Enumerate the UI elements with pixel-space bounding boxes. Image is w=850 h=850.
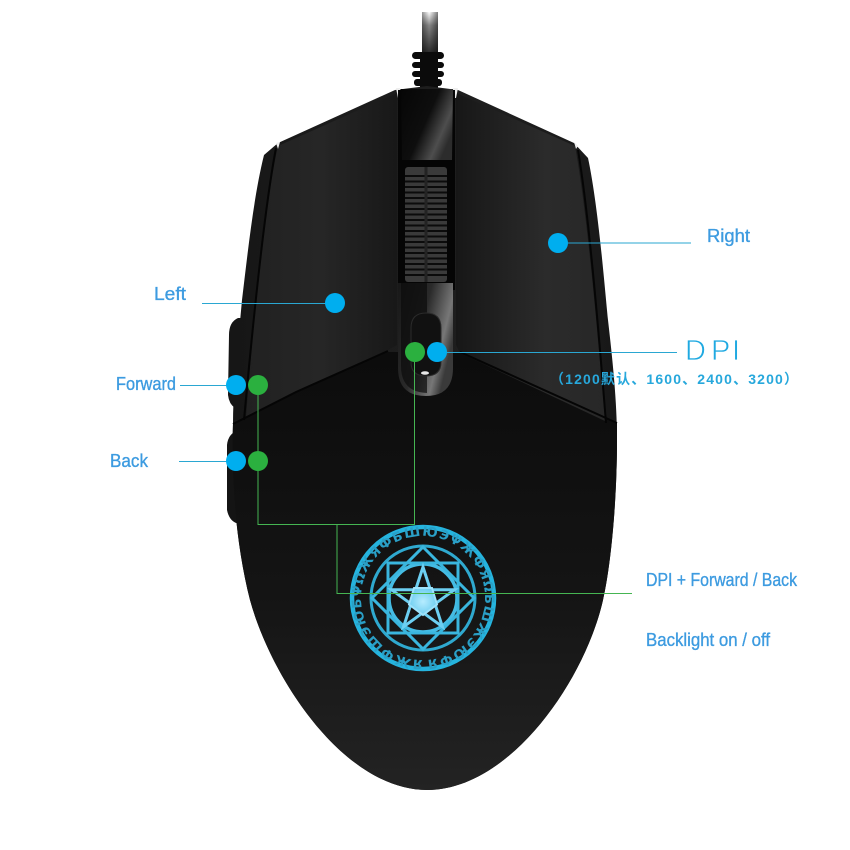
label: DPI + Forward / Back: DPI + Forward / Back [646, 570, 798, 590]
shell seams [233, 148, 617, 424]
label: DPI options: （1200默认、1600、2400、3200） [550, 371, 798, 387]
label: Back: Back [110, 451, 149, 471]
label: Forward: Forward [116, 374, 176, 394]
diamond [372, 547, 474, 649]
pentagram [392, 567, 454, 627]
label: Left: Left [154, 284, 186, 304]
callout lines [179, 243, 691, 594]
label: Right: Right [707, 226, 750, 246]
dpi slot [398, 283, 453, 396]
top collar [401, 89, 453, 160]
led [421, 371, 429, 375]
label: DPI: DPI [685, 335, 740, 367]
square [388, 563, 458, 633]
label: Backlight on / off: Backlight on / off [646, 630, 771, 650]
mouse body [233, 86, 617, 790]
side button: forward [228, 318, 244, 408]
marker dots [226, 233, 568, 471]
right button [456, 93, 605, 421]
mouse illustration [227, 12, 617, 790]
centre channel [398, 90, 455, 290]
cable [412, 12, 444, 88]
lower shell [233, 352, 617, 790]
side button: back [227, 430, 246, 523]
top notches [276, 88, 578, 149]
left button [246, 93, 397, 418]
dpi button [411, 313, 441, 376]
scroll wheel [405, 167, 447, 282]
magic circle logo [350, 524, 496, 672]
